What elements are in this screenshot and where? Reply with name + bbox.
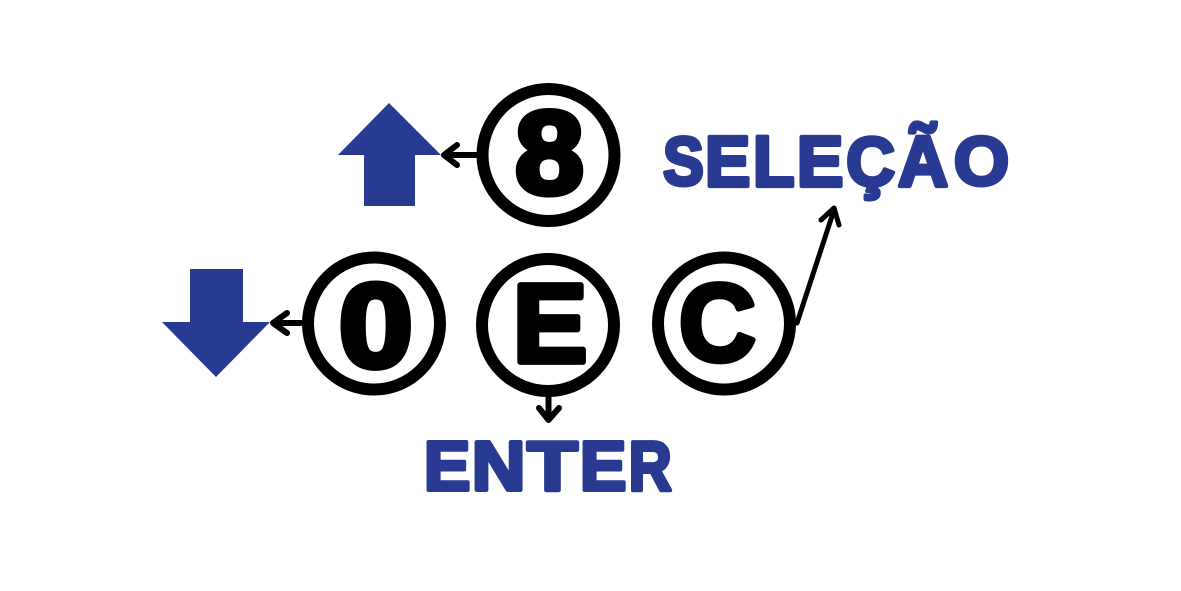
label: selection — [663, 121, 1009, 201]
label: enter: R — [629, 426, 672, 505]
icon: up arrow — [338, 103, 441, 206]
key: 8 — [482, 87, 614, 221]
label: enter: E — [580, 427, 626, 505]
label: enter: N — [472, 428, 525, 505]
arrow: 8 to up arrow — [444, 145, 476, 165]
arrow: C to selection — [797, 208, 839, 323]
label: selection: E — [705, 122, 750, 201]
label: selection: Ã — [898, 121, 948, 201]
label: selection: Ç — [846, 124, 895, 200]
key: C — [658, 258, 790, 390]
key: E — [482, 259, 614, 391]
label: enter: T — [527, 428, 578, 506]
key: E: E — [513, 261, 587, 386]
label: selection: O — [954, 123, 1009, 200]
label: selection: S — [663, 123, 704, 200]
key: C: C — [679, 261, 756, 384]
label: enter — [424, 426, 672, 506]
label: selection: E — [797, 121, 843, 201]
label: enter: E — [424, 427, 470, 505]
key: 8: 8 — [515, 87, 584, 219]
key: 0: 0 — [339, 259, 413, 392]
arrow: 0 to down arrow — [273, 313, 301, 333]
label: selection: L — [753, 122, 794, 201]
arrow: E to enter — [539, 396, 559, 420]
key: 0 — [308, 258, 440, 392]
icon: down arrow — [162, 269, 270, 377]
